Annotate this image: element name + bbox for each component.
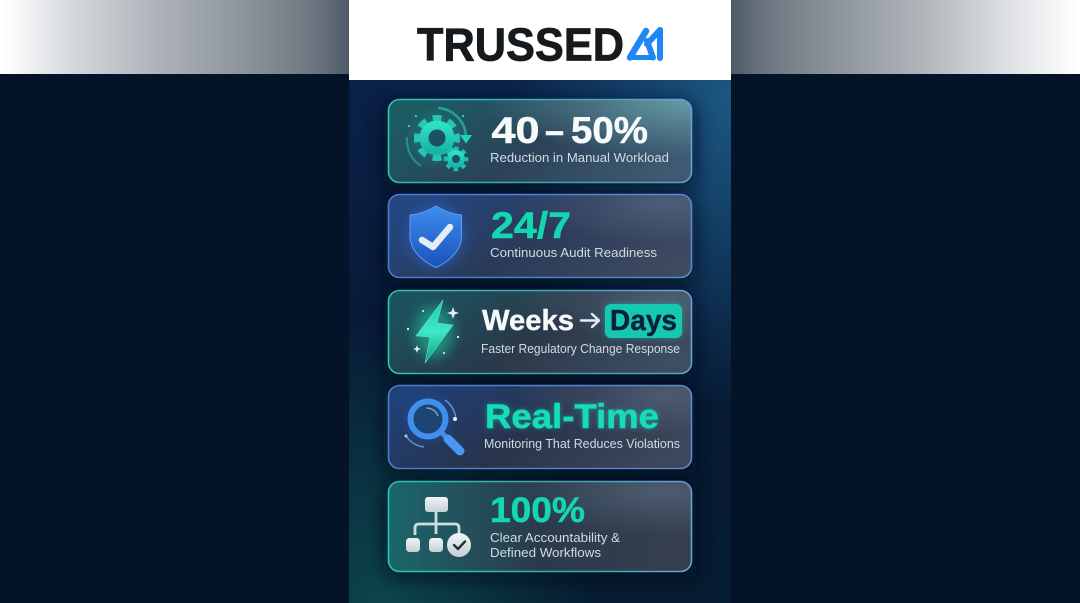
stat: real-time: Real-Time [485, 398, 659, 436]
label: monitoring that reduces violations: Monitoring That Reduces Violations [484, 436, 680, 451]
icon: magnifier [404, 399, 460, 451]
logo header [349, 0, 731, 80]
label: clear accountability and defined workflows [490, 530, 620, 560]
label: clear accountability and defined workflows: Defined Workflows [490, 545, 602, 560]
icon: org chart with check [406, 497, 471, 557]
label: continuous audit readiness: Continuous Audit Readiness [490, 245, 657, 260]
highlighted stat: days: Days [610, 305, 677, 337]
card: 40–50% reduction [384, 100, 696, 190]
icon: shield with check [406, 204, 466, 268]
top band: right gradient [731, 0, 1080, 74]
card: real-time monitoring [384, 386, 696, 476]
stat: 40–50% [492, 110, 648, 151]
arrow [581, 314, 599, 327]
stat: 24/7: 24/7 [491, 205, 571, 246]
card: weeks to days [384, 290, 696, 381]
stat: 40–50%: 40 [492, 110, 540, 151]
logo mark [630, 30, 660, 58]
label: reduction in manual workload: Reduction in Manual Workload [490, 150, 669, 165]
central panel background [349, 80, 731, 603]
card: 100% accountability [384, 482, 696, 579]
stat: weeks: Weeks [482, 305, 574, 337]
icon: gears [407, 108, 472, 170]
label: faster regulatory change response: Faster Regulatory Change Response [481, 341, 680, 356]
card: 24/7 audit readiness [384, 194, 696, 285]
logo wordmark: TRUSSED [417, 18, 624, 70]
icon: lightning bolt [407, 300, 459, 363]
stat: 40–50%: 50% [571, 110, 648, 151]
label: clear accountability and defined workflows: Clear Accountability & [490, 530, 620, 545]
top band: left gradient [0, 0, 349, 74]
stat: 100%: 100% [490, 491, 585, 530]
stat: real-time glow: Real-Time [485, 398, 659, 436]
stat: 40–50%: – [545, 110, 564, 151]
